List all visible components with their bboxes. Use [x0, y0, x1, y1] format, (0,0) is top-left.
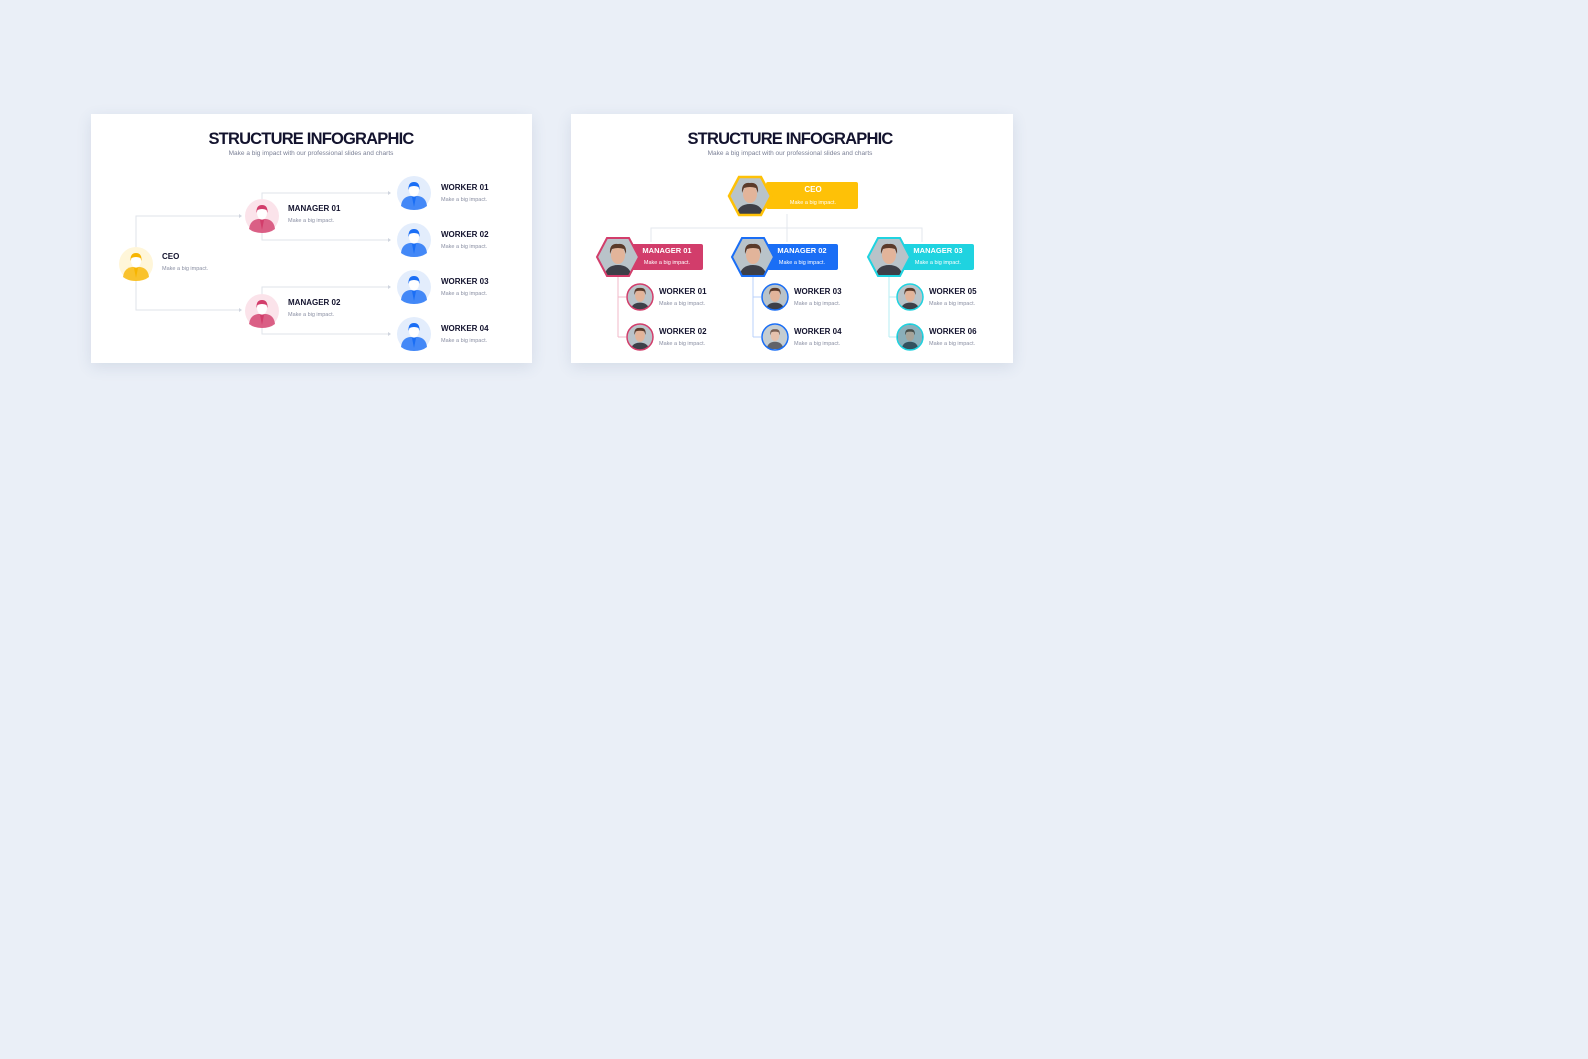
CEO node: CEO [162, 252, 179, 261]
workers: Make a big impact. [441, 291, 488, 297]
CEO node [729, 176, 858, 216]
manager 01 [245, 199, 341, 233]
workers: Make a big impact. [441, 338, 488, 344]
title: STRUCTURE INFOGRAPHIC [208, 130, 414, 148]
panel: right structure slide [571, 114, 1013, 363]
workers: Make a big impact. [441, 197, 488, 203]
workers: WORKER 02 [441, 230, 489, 239]
workers: Make a big impact. [929, 301, 976, 307]
title: STRUCTURE INFOGRAPHIC [687, 130, 893, 148]
connectors [136, 193, 388, 334]
manager 01: MANAGER 01 [642, 246, 692, 255]
manager 02: MANAGER 02 [288, 298, 341, 307]
workers [397, 176, 489, 351]
connectors [618, 214, 922, 337]
manager 03 [868, 237, 974, 277]
subtitle: Make a big impact with our professional slides and charts [229, 150, 394, 157]
workers: Make a big impact. [659, 301, 706, 307]
workers: WORKER 04 [794, 327, 842, 336]
workers: WORKER 01 [659, 287, 707, 296]
manager 01: MANAGER 01 [288, 204, 341, 213]
CEO node: CEO [804, 185, 822, 194]
manager 02 [245, 294, 341, 328]
manager 02: MANAGER 02 [777, 246, 827, 255]
workers: Make a big impact. [441, 244, 488, 250]
subtitle: Make a big impact with our professional slides and charts [708, 150, 873, 157]
workers: Make a big impact. [794, 301, 841, 307]
workers [626, 283, 977, 351]
panel: left structure slide [91, 114, 532, 363]
CEO node: Make a big impact. [790, 200, 837, 206]
CEO node: Make a big impact. [162, 266, 209, 272]
workers: Make a big impact. [794, 341, 841, 347]
manager 01 [597, 237, 703, 277]
workers: WORKER 05 [929, 287, 977, 296]
manager 01: Make a big impact. [288, 218, 335, 224]
CEO node [119, 247, 209, 281]
manager 03: MANAGER 03 [913, 246, 963, 255]
manager 02: Make a big impact. [288, 312, 335, 318]
manager 02 [732, 237, 838, 277]
workers: WORKER 06 [929, 327, 977, 336]
manager 03: Make a big impact. [915, 260, 962, 266]
manager 01: Make a big impact. [644, 260, 691, 266]
workers: WORKER 01 [441, 183, 489, 192]
workers: WORKER 04 [441, 324, 489, 333]
manager 02: Make a big impact. [779, 260, 826, 266]
workers: Make a big impact. [929, 341, 976, 347]
workers: WORKER 03 [794, 287, 842, 296]
workers: Make a big impact. [659, 341, 706, 347]
workers: WORKER 02 [659, 327, 707, 336]
workers: WORKER 03 [441, 277, 489, 286]
